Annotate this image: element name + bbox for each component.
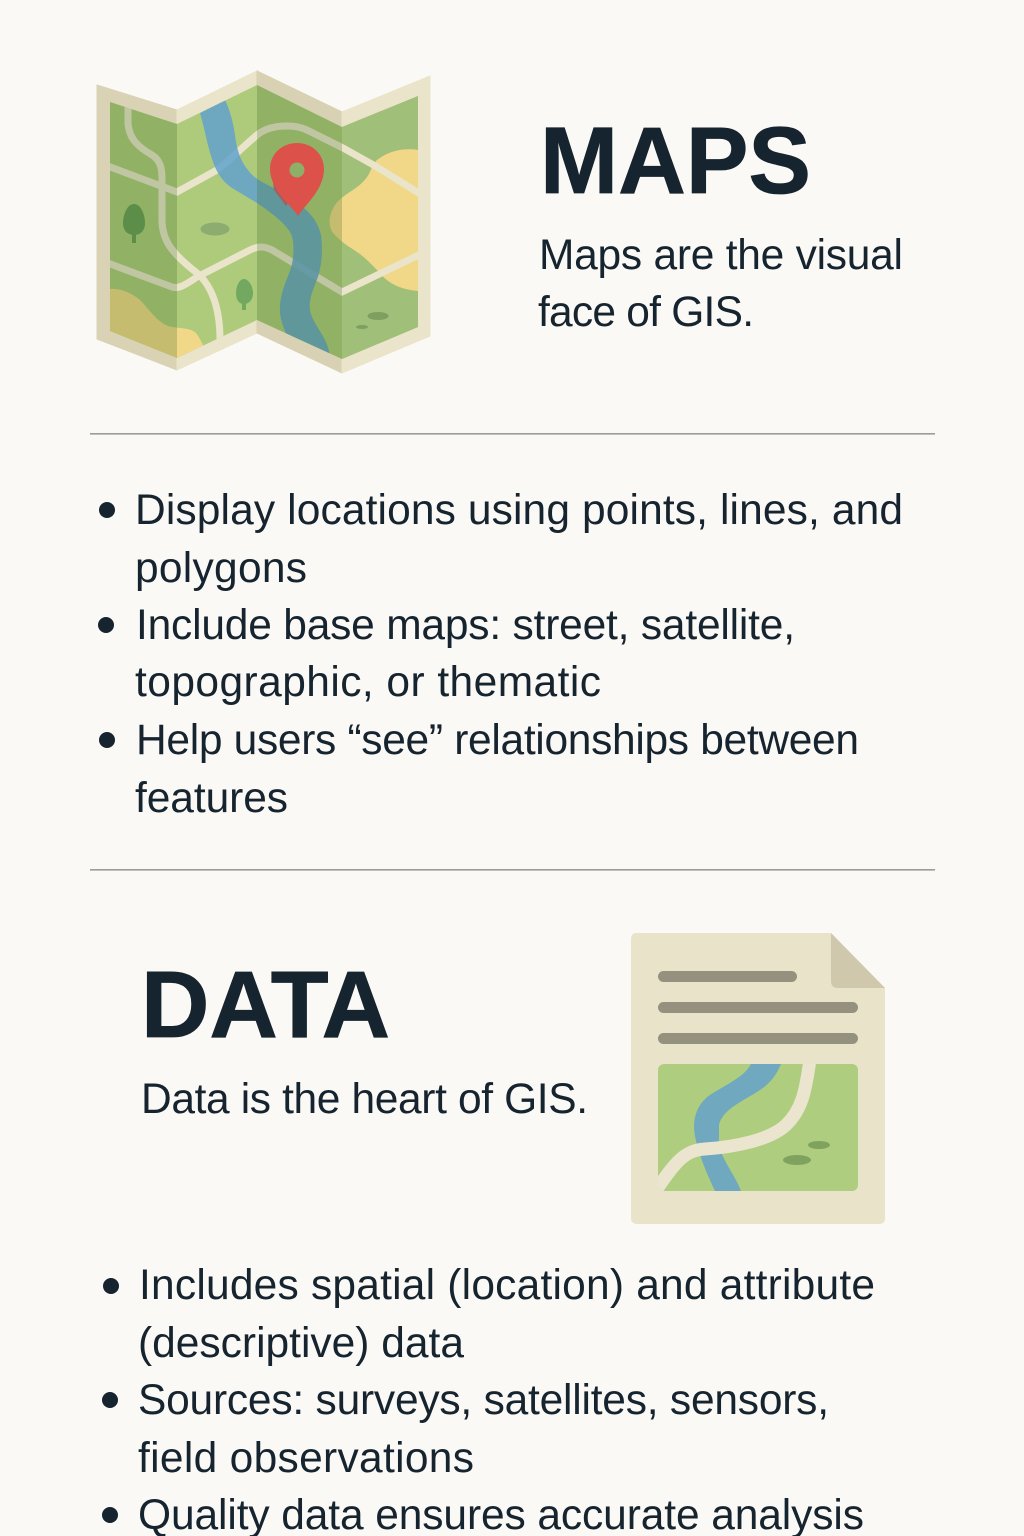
list: data bullets: Includes spatial (location) and attribute	[139, 1262, 875, 1309]
icon: folded map	[97, 70, 430, 373]
list: maps bullets: Include base maps: street, satellite,	[136, 602, 795, 649]
panel: maps section	[97, 70, 903, 373]
list: maps bullets: Display locations using points, lines, and	[135, 487, 903, 534]
list: maps bullets	[98, 487, 903, 822]
list: maps bullets: polygons	[135, 545, 307, 592]
heading: DATA: DATA	[141, 952, 390, 1058]
list: data bullets: field observations	[138, 1435, 474, 1482]
icon: document with map	[631, 933, 885, 1224]
list: data bullets: (descriptive) data	[138, 1320, 464, 1367]
heading: MAPS: MAPS	[540, 108, 811, 214]
list: maps bullets: Help users “see” relationships between	[136, 717, 859, 764]
list: data bullets: Sources: surveys, satellites, sensors,	[138, 1377, 829, 1424]
icon: red location pin	[270, 143, 324, 216]
text block: data tagline: Data is the heart of GIS.	[141, 1076, 588, 1123]
list: maps bullets: features	[135, 775, 288, 822]
text block: maps tagline: Maps are the visual	[539, 232, 903, 279]
text block: maps tagline: face of GIS.	[538, 289, 754, 336]
list: data bullets	[102, 1262, 875, 1536]
panel: data section	[141, 933, 885, 1224]
text block: maps tagline	[538, 232, 903, 336]
list: maps bullets: topographic, or thematic	[135, 659, 601, 706]
